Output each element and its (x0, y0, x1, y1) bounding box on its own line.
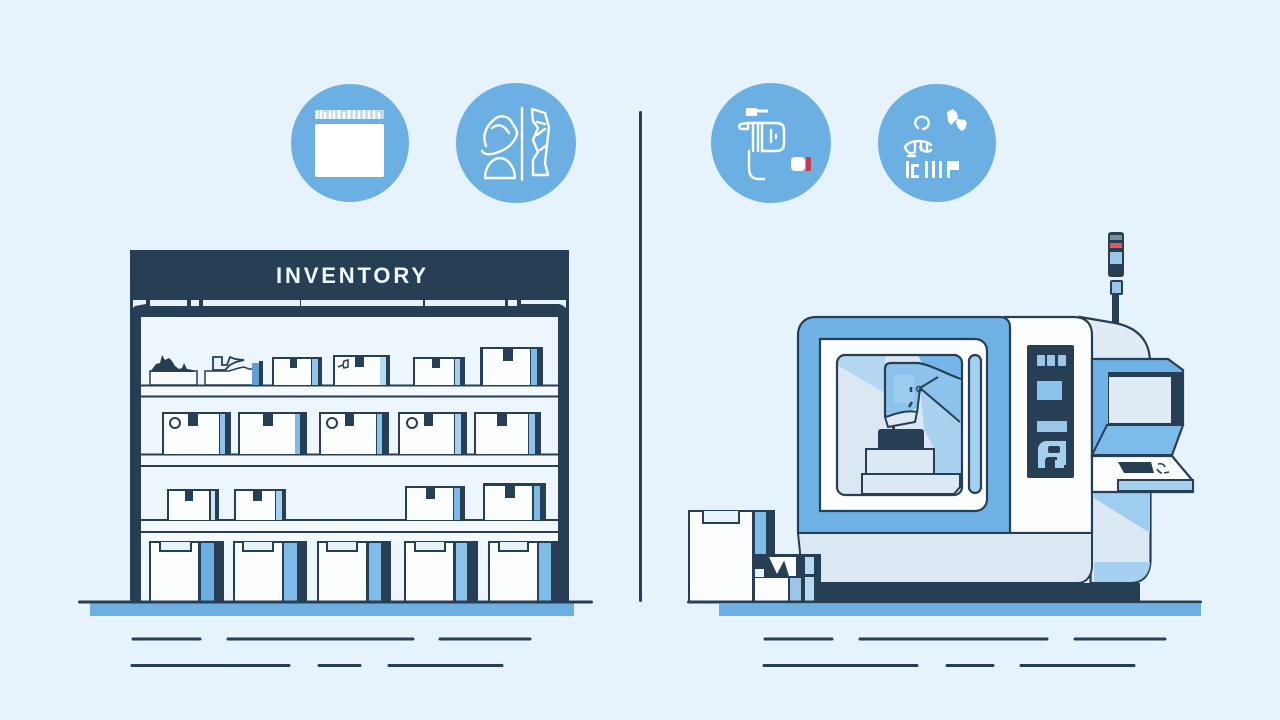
console (1092, 456, 1193, 492)
row 3 boxes (167, 483, 546, 520)
row 1 boxes (150, 347, 543, 385)
right floor (687, 600, 1202, 616)
machine base (821, 583, 1140, 602)
icon: pump badge (711, 83, 831, 203)
icon: tools badge (456, 83, 576, 203)
divider (639, 111, 642, 602)
panel: machine (687, 232, 1202, 616)
control panel (1027, 345, 1074, 478)
row 4 boxes (149, 541, 558, 602)
blue door (798, 317, 1010, 533)
door handle (969, 355, 981, 493)
large box (688, 510, 775, 602)
rear housing (1080, 317, 1150, 366)
lower column (1090, 490, 1150, 583)
lower body (798, 533, 1092, 583)
left floor (78, 600, 593, 616)
shelf 2 (141, 454, 558, 467)
beacon light (1108, 232, 1124, 324)
left placeholder text lines (132, 639, 530, 666)
machine body white (1005, 317, 1092, 533)
inventory header (130, 250, 569, 300)
shelf 1 (141, 384, 558, 398)
small box (754, 554, 821, 602)
cutting tool (885, 363, 961, 430)
panel: inventory shelving (78, 250, 593, 616)
icon: process badge (878, 84, 996, 202)
row 2 boxes (162, 412, 541, 454)
inventory label: INVENTORY (276, 263, 426, 288)
door window (820, 339, 987, 511)
shelf 3 (141, 519, 558, 541)
rack frame (130, 300, 569, 603)
icon: storage box badge (291, 84, 409, 202)
workpiece stack (862, 429, 960, 494)
glass chamber (837, 355, 962, 495)
right placeholder text lines (764, 639, 1165, 666)
monitor (1092, 359, 1183, 455)
